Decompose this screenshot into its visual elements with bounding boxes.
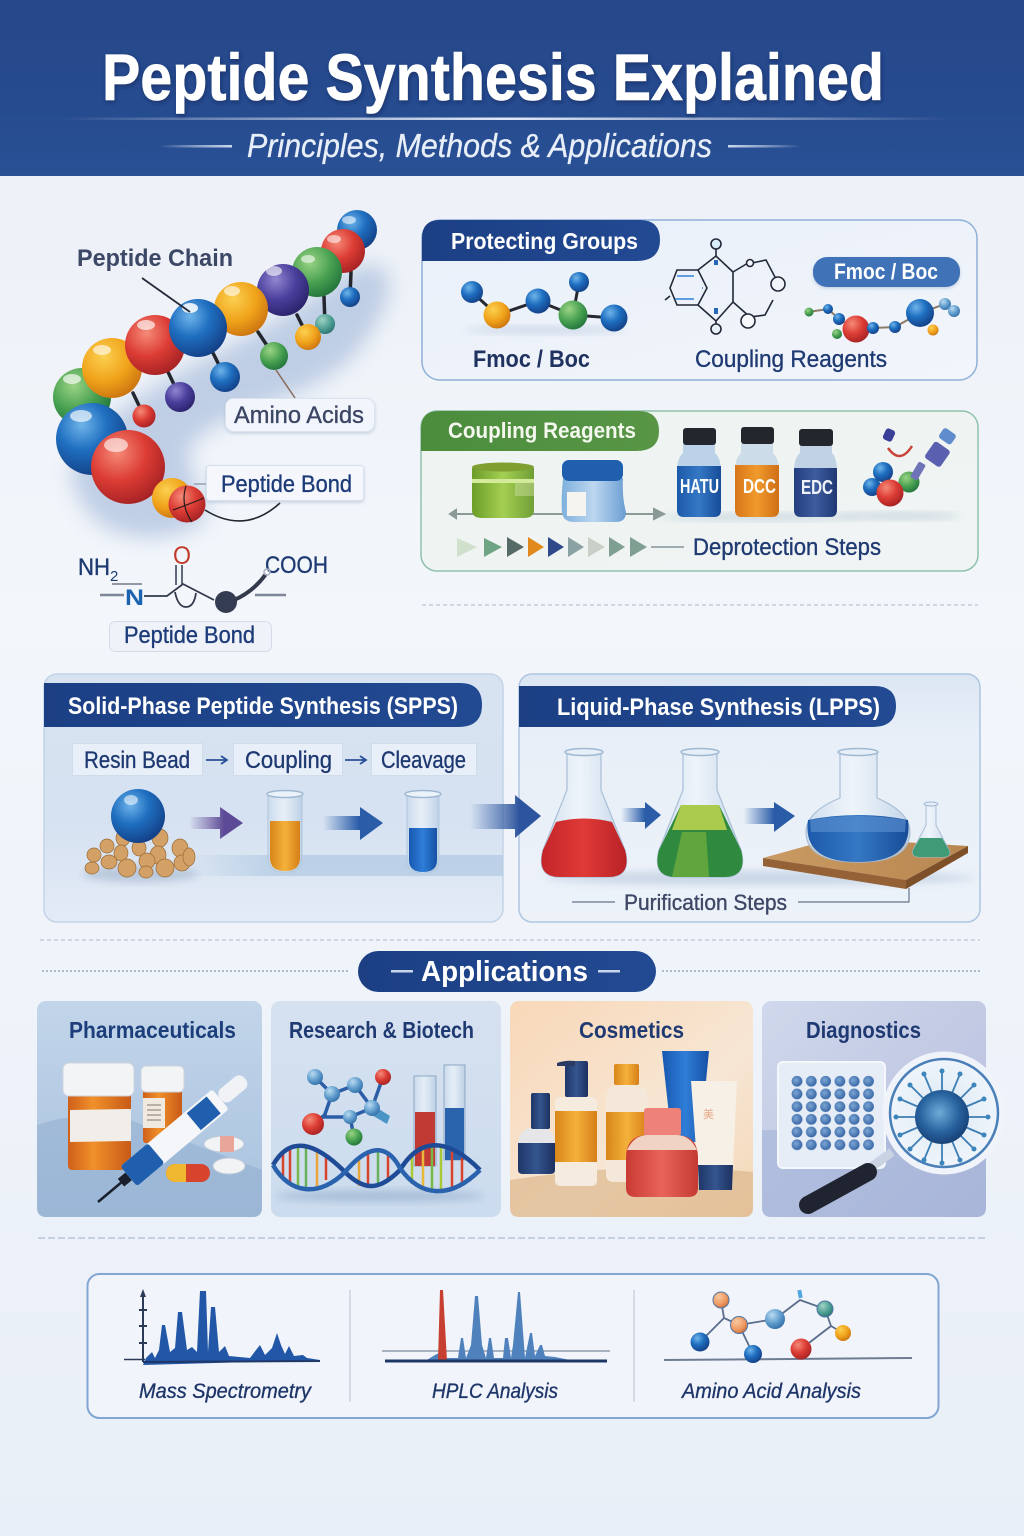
card: diagnostics bbox=[762, 1001, 1003, 1217]
arrow: spps to lpps bbox=[470, 795, 541, 838]
blue tube bbox=[662, 1051, 709, 1142]
label: amino acids: Amino Acids bbox=[234, 402, 364, 429]
card title: Research & Biotech bbox=[289, 1017, 474, 1043]
heading: coupling reagents: Coupling Reagents bbox=[448, 418, 636, 443]
label: fmoc boc: Fmoc / Boc bbox=[473, 346, 590, 373]
panel: lpps bbox=[519, 674, 980, 922]
well plate bbox=[778, 1062, 885, 1168]
bottle: edc: EDC bbox=[801, 477, 833, 499]
bottle: navy bbox=[518, 1093, 555, 1174]
badge: fmoc boc bbox=[813, 257, 960, 287]
molecule bbox=[302, 1069, 391, 1146]
header banner bbox=[0, 0, 1024, 176]
heading: lpps: Liquid-Phase Synthesis (LPPS) bbox=[557, 694, 880, 721]
label: coupling reagents: Coupling Reagents bbox=[695, 346, 887, 373]
bottle: dcc bbox=[735, 427, 779, 517]
card: pharmaceuticals bbox=[37, 1001, 262, 1217]
heading: lpps bbox=[519, 686, 896, 727]
label: peptide chain: Peptide Chain bbox=[77, 245, 233, 272]
pills bbox=[166, 1136, 245, 1182]
peptide bond structure diagram: NH bbox=[78, 554, 110, 581]
heading: spps: Solid-Phase Peptide Synthesis (SPPS) bbox=[68, 693, 458, 720]
peptide bond structure diagram: COOH bbox=[265, 552, 328, 579]
arrow: blue bbox=[323, 807, 383, 840]
molecule chain bbox=[804, 298, 960, 342]
peptide chain 3D model bbox=[53, 210, 390, 537]
molecule group bbox=[840, 427, 960, 520]
bottle: orange bbox=[606, 1064, 648, 1182]
pump bottle bbox=[555, 1061, 597, 1186]
chart: amino acid network bbox=[664, 1290, 912, 1363]
red jar bbox=[626, 1108, 698, 1197]
heading: applications: Applications bbox=[421, 956, 588, 988]
label: amino acid analysis: Amino Acid Analysis bbox=[680, 1379, 861, 1403]
panel: analysis methods bbox=[88, 1274, 938, 1418]
card title: Pharmaceuticals bbox=[69, 1017, 236, 1043]
card title: Cosmetics bbox=[579, 1017, 684, 1043]
heading: protecting groups: Protecting Groups bbox=[451, 228, 638, 254]
label: deprotection steps: Deprotection Steps bbox=[693, 534, 881, 561]
label: peptide bond: Peptide Bond bbox=[124, 622, 255, 649]
dna helix bbox=[273, 1144, 480, 1191]
title: Peptide Synthesis Explained bbox=[102, 40, 884, 114]
reagent bottles bbox=[660, 427, 860, 520]
bottle: edc bbox=[794, 429, 837, 517]
subtitle: Principles, Methods & Applications bbox=[247, 127, 712, 164]
heading: protecting groups bbox=[422, 220, 660, 261]
panel: coupling reagents bbox=[421, 411, 978, 571]
badge: fmoc boc: Fmoc / Boc bbox=[834, 259, 938, 284]
pill bottle: small bbox=[141, 1066, 184, 1143]
heading: applications bbox=[358, 951, 656, 992]
peptide bond structure diagram bbox=[78, 542, 328, 613]
card title: Diagnostics bbox=[806, 1017, 921, 1043]
chemical structure bbox=[665, 239, 785, 334]
resin beads and sphere bbox=[82, 789, 198, 882]
round flask: blue bbox=[806, 748, 910, 862]
heading: coupling reagents bbox=[421, 411, 659, 451]
panel: spps bbox=[44, 674, 503, 922]
jar: green bbox=[472, 462, 534, 518]
panel: protecting groups bbox=[422, 220, 977, 380]
label: hplc analysis: HPLC Analysis bbox=[432, 1379, 558, 1403]
label: amino acids bbox=[226, 370, 374, 432]
white tube: 美 bbox=[703, 1108, 714, 1121]
small flask: green bbox=[913, 802, 950, 857]
chart: hplc bbox=[382, 1290, 610, 1361]
flask: green bbox=[657, 748, 743, 877]
label: mass spectrometry: Mass Spectrometry bbox=[139, 1379, 312, 1403]
arrow bbox=[206, 756, 227, 764]
peptide bond structure diagram: 2 bbox=[110, 568, 118, 585]
pill bottle: large bbox=[63, 1063, 134, 1170]
white tube bbox=[691, 1081, 737, 1190]
arrow: purple bbox=[189, 807, 243, 839]
virus bbox=[894, 1068, 990, 1166]
label: peptide chain bbox=[77, 245, 233, 312]
step: cleavage: Cleavage bbox=[381, 747, 466, 774]
peptide bond structure diagram: O bbox=[173, 542, 191, 570]
label: peptide bond callout bbox=[194, 466, 364, 521]
bottle: dcc: DCC bbox=[743, 476, 776, 498]
bottle: hatu bbox=[677, 428, 721, 517]
chart: mass spectrometry bbox=[124, 1289, 320, 1365]
molecule: fmoc boc bbox=[461, 272, 628, 334]
flask: red bbox=[541, 748, 627, 877]
card: research and biotech bbox=[271, 1001, 501, 1217]
heading: spps bbox=[44, 683, 482, 727]
test tube: orange bbox=[267, 790, 303, 872]
card: cosmetics bbox=[510, 1001, 753, 1217]
deprotection step arrows bbox=[457, 537, 684, 557]
magnifier with virus bbox=[808, 1054, 1003, 1205]
wooden board bbox=[763, 838, 968, 889]
step: resin bead: Resin Bead bbox=[84, 747, 190, 774]
syringe bbox=[90, 1069, 253, 1212]
arrow bbox=[743, 802, 795, 832]
label: peptide bond callout: Peptide Bond bbox=[221, 471, 352, 498]
peptide bond structure diagram: N bbox=[125, 585, 144, 610]
arrow behind jars bbox=[450, 509, 664, 519]
step: coupling: Coupling bbox=[245, 747, 332, 774]
label: purification steps: Purification Steps bbox=[624, 890, 787, 915]
test tube: blue bbox=[405, 790, 441, 873]
label: purification steps bbox=[572, 888, 909, 915]
test tubes bbox=[414, 1065, 465, 1166]
jar: blue bbox=[562, 460, 626, 522]
side-chain spheres bbox=[132, 287, 360, 428]
bottle: hatu: HATU bbox=[680, 476, 719, 498]
arrow bbox=[621, 802, 661, 829]
arrow bbox=[345, 756, 366, 764]
